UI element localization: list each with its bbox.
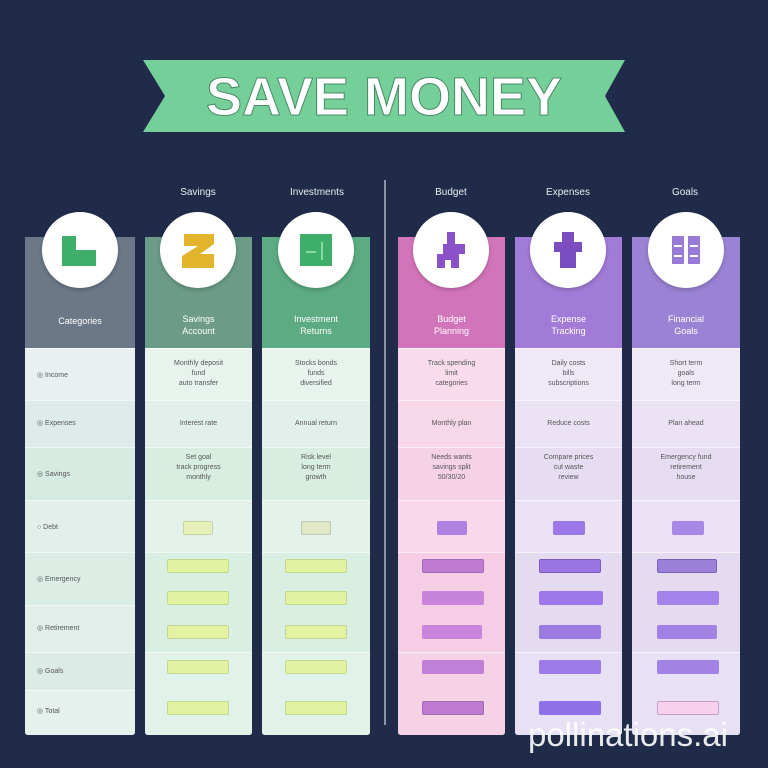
divider (384, 180, 386, 725)
text: Investments (290, 187, 344, 198)
icon: col6 (648, 212, 724, 288)
panel: column 4: Needs wants (431, 454, 472, 461)
panel: column 4: Track spending (428, 360, 475, 367)
panel: column 4: Budget (437, 314, 466, 324)
panel: column 2: Set goal (186, 454, 211, 461)
icon: col2 (160, 212, 236, 288)
text: Budget (435, 187, 467, 198)
text: Goals (672, 187, 698, 198)
panel: column 3: Stocks bonds (295, 360, 337, 367)
panel: column 4: Planning (434, 326, 469, 336)
icon: col3 (278, 212, 354, 288)
panel: column 6: Financial (668, 314, 704, 324)
panel: column 6 (632, 237, 740, 735)
panel: column 2: monthly (186, 474, 211, 481)
panel: column 2: track progress (176, 464, 221, 471)
panel: column 1 categories: ◎ Goals (37, 668, 63, 675)
panel: column 5 (515, 237, 622, 735)
panel: column 2 (145, 237, 252, 735)
panel: column 1 categories: ◎ Retirement (37, 625, 79, 632)
panel: column 3: diversified (300, 380, 332, 387)
panel: column 3: growth (305, 474, 326, 481)
panel: column 2: Savings (182, 314, 215, 324)
title banner (143, 60, 625, 132)
panel: column 6: Plan ahead (668, 420, 704, 427)
column labels: Savings (180, 187, 216, 198)
panel: column 1 categories: ◎ Emergency (37, 576, 80, 583)
panel: column 4: savings split (432, 464, 471, 471)
panel: column 2: Interest rate (180, 420, 217, 427)
panel: column 4: categories (435, 380, 468, 387)
panel: column 6: Goals (674, 326, 698, 336)
panel: column 2: auto transfer (179, 380, 218, 387)
panel: column 4 (398, 237, 505, 735)
panel: column 2: Account (182, 326, 215, 336)
panel: column 5: bills (562, 370, 575, 377)
panel: column 1 categories: ◎ Income (37, 372, 68, 379)
panel: column 5: Tracking (551, 326, 586, 336)
panel: column 5: Daily costs (552, 360, 585, 367)
panel: column 4: 50/30/20 (438, 474, 465, 481)
watermark: pollinations.ai (528, 716, 728, 753)
panel: column 1 categories: ○ Debt (37, 524, 58, 531)
panel: column 3 (262, 237, 370, 735)
panel: column 6: long term (671, 380, 701, 387)
panel: column 1 categories (25, 237, 135, 735)
panel: column 6: goals (678, 370, 694, 377)
panel: column 5: cut waste (554, 464, 583, 471)
panel: column 2: Monthly deposit (174, 360, 223, 367)
icon: col5 (530, 212, 606, 288)
panel: column 3: Investment (294, 314, 338, 324)
panel: column 5: Reduce costs (547, 420, 590, 427)
panel: column 4: limit (445, 370, 458, 377)
panel: column 3: Annual return (295, 420, 337, 427)
panel: column 3: Risk level (301, 454, 331, 461)
panel: column 3: long term (301, 464, 331, 471)
panel: column 6: retirement (670, 464, 702, 471)
panel: column 5: review (558, 474, 579, 481)
panel: column 5: Compare prices (544, 454, 593, 461)
panel: column 3: funds (307, 370, 325, 377)
panel: column 1 categories: ◎ Savings (37, 471, 70, 478)
panel: column 4: Monthly plan (432, 420, 471, 427)
panel: column 3: Returns (300, 326, 332, 336)
panel: column 1 categories: Categories (58, 316, 102, 326)
panel: column 6: Emergency fund (660, 454, 711, 461)
panel: column 5: subscriptions (548, 380, 589, 387)
panel: column 1 categories: ◎ Total (37, 708, 60, 715)
panel: column 2: fund (192, 370, 205, 377)
text: Expenses (546, 187, 590, 198)
icon: col1 (42, 212, 118, 288)
icon: col4 (413, 212, 489, 288)
panel: column 1 categories: ◎ Expenses (37, 420, 76, 427)
panel: column 6: house (676, 474, 696, 481)
title banner: SAVE MONEY (206, 67, 562, 127)
panel: column 5: Expense (551, 314, 586, 324)
panel: column 6: Short term (670, 360, 702, 367)
